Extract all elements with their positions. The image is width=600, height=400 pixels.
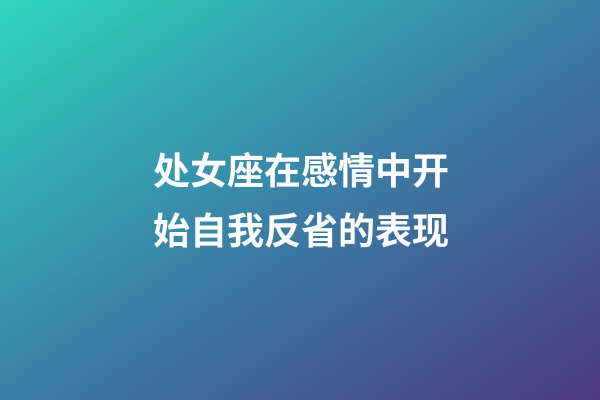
title: 始自我反省的表现 <box>153 211 449 252</box>
title <box>153 151 449 252</box>
title: 处女座在感情中开 <box>153 151 449 192</box>
